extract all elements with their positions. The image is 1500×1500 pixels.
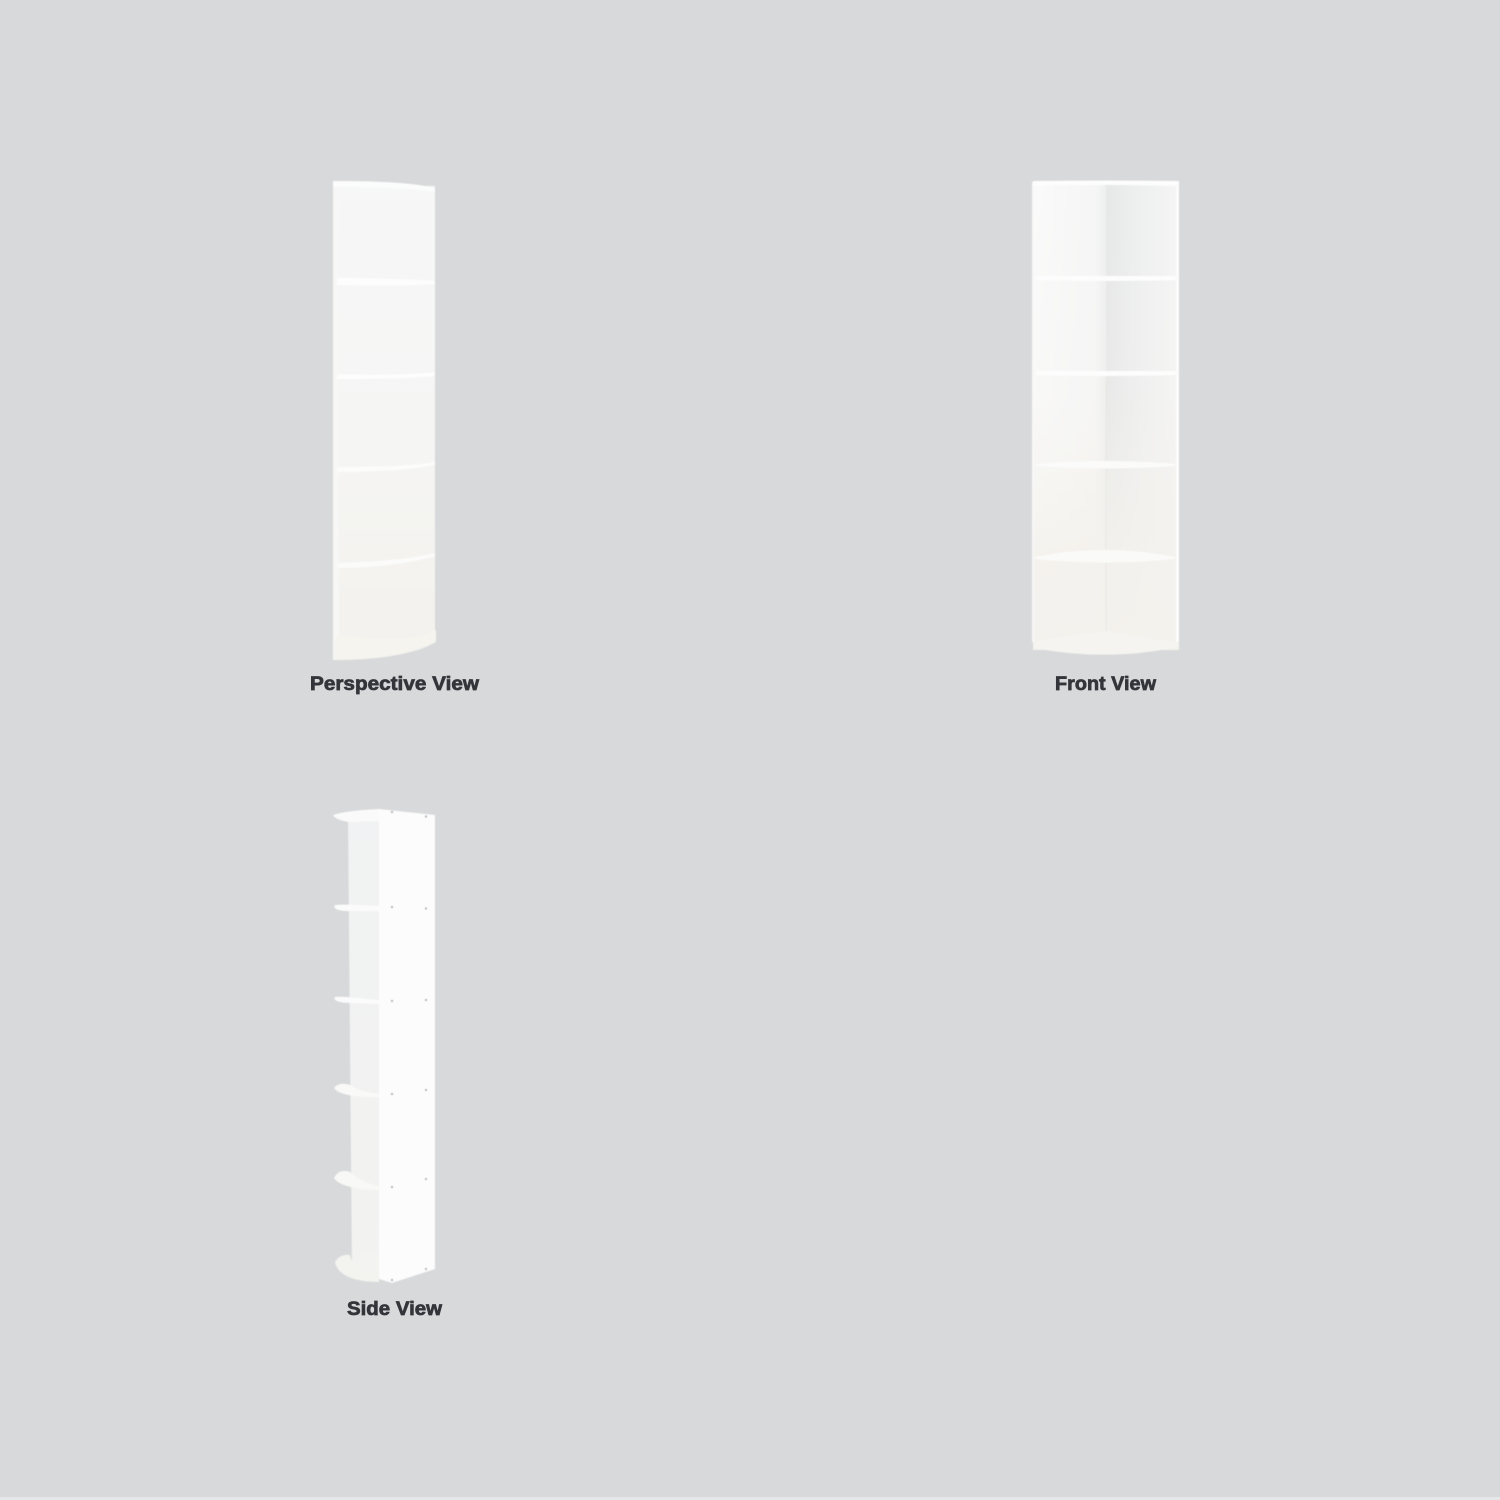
side shelf 3 — [334, 997, 379, 1004]
front base — [1034, 631, 1178, 655]
side shelf 2 — [334, 905, 379, 911]
perspective shelf 1 — [337, 278, 435, 286]
perspective shelf 4 — [337, 553, 435, 568]
front shelf 3 — [1035, 461, 1175, 468]
perspective base — [335, 630, 436, 660]
front left panel — [1033, 184, 1106, 650]
side screw dots — [391, 811, 427, 1281]
side shelf 4 — [334, 1084, 379, 1097]
front view shelf — [1032, 180, 1179, 655]
front shelf 2 — [1036, 371, 1176, 376]
label: side view: Side View — [347, 1299, 442, 1320]
front shelf 4 — [1035, 550, 1175, 562]
front top board — [1033, 180, 1179, 186]
side interior panel — [348, 818, 379, 1278]
front corner line — [1106, 380, 1107, 632]
perspective body — [339, 186, 435, 660]
front right edge — [1176, 182, 1179, 642]
label: front view: Front View — [1055, 674, 1156, 695]
perspective shelf 2 — [337, 372, 435, 379]
label: perspective view: Perspective View — [310, 674, 479, 695]
side view shelf — [333, 809, 435, 1283]
side panel — [379, 809, 435, 1283]
perspective shelf 3 — [337, 462, 435, 472]
perspective top board — [333, 181, 435, 192]
side shelf 5 — [334, 1171, 379, 1190]
perspective left post — [333, 181, 339, 660]
side top shelf — [333, 809, 379, 822]
front shelf 1 — [1036, 276, 1176, 281]
front warm lower tint — [1033, 184, 1179, 650]
front left edge — [1032, 182, 1034, 642]
side base — [335, 1255, 379, 1282]
perspective view shelf — [333, 181, 436, 660]
front right panel — [1106, 184, 1179, 650]
